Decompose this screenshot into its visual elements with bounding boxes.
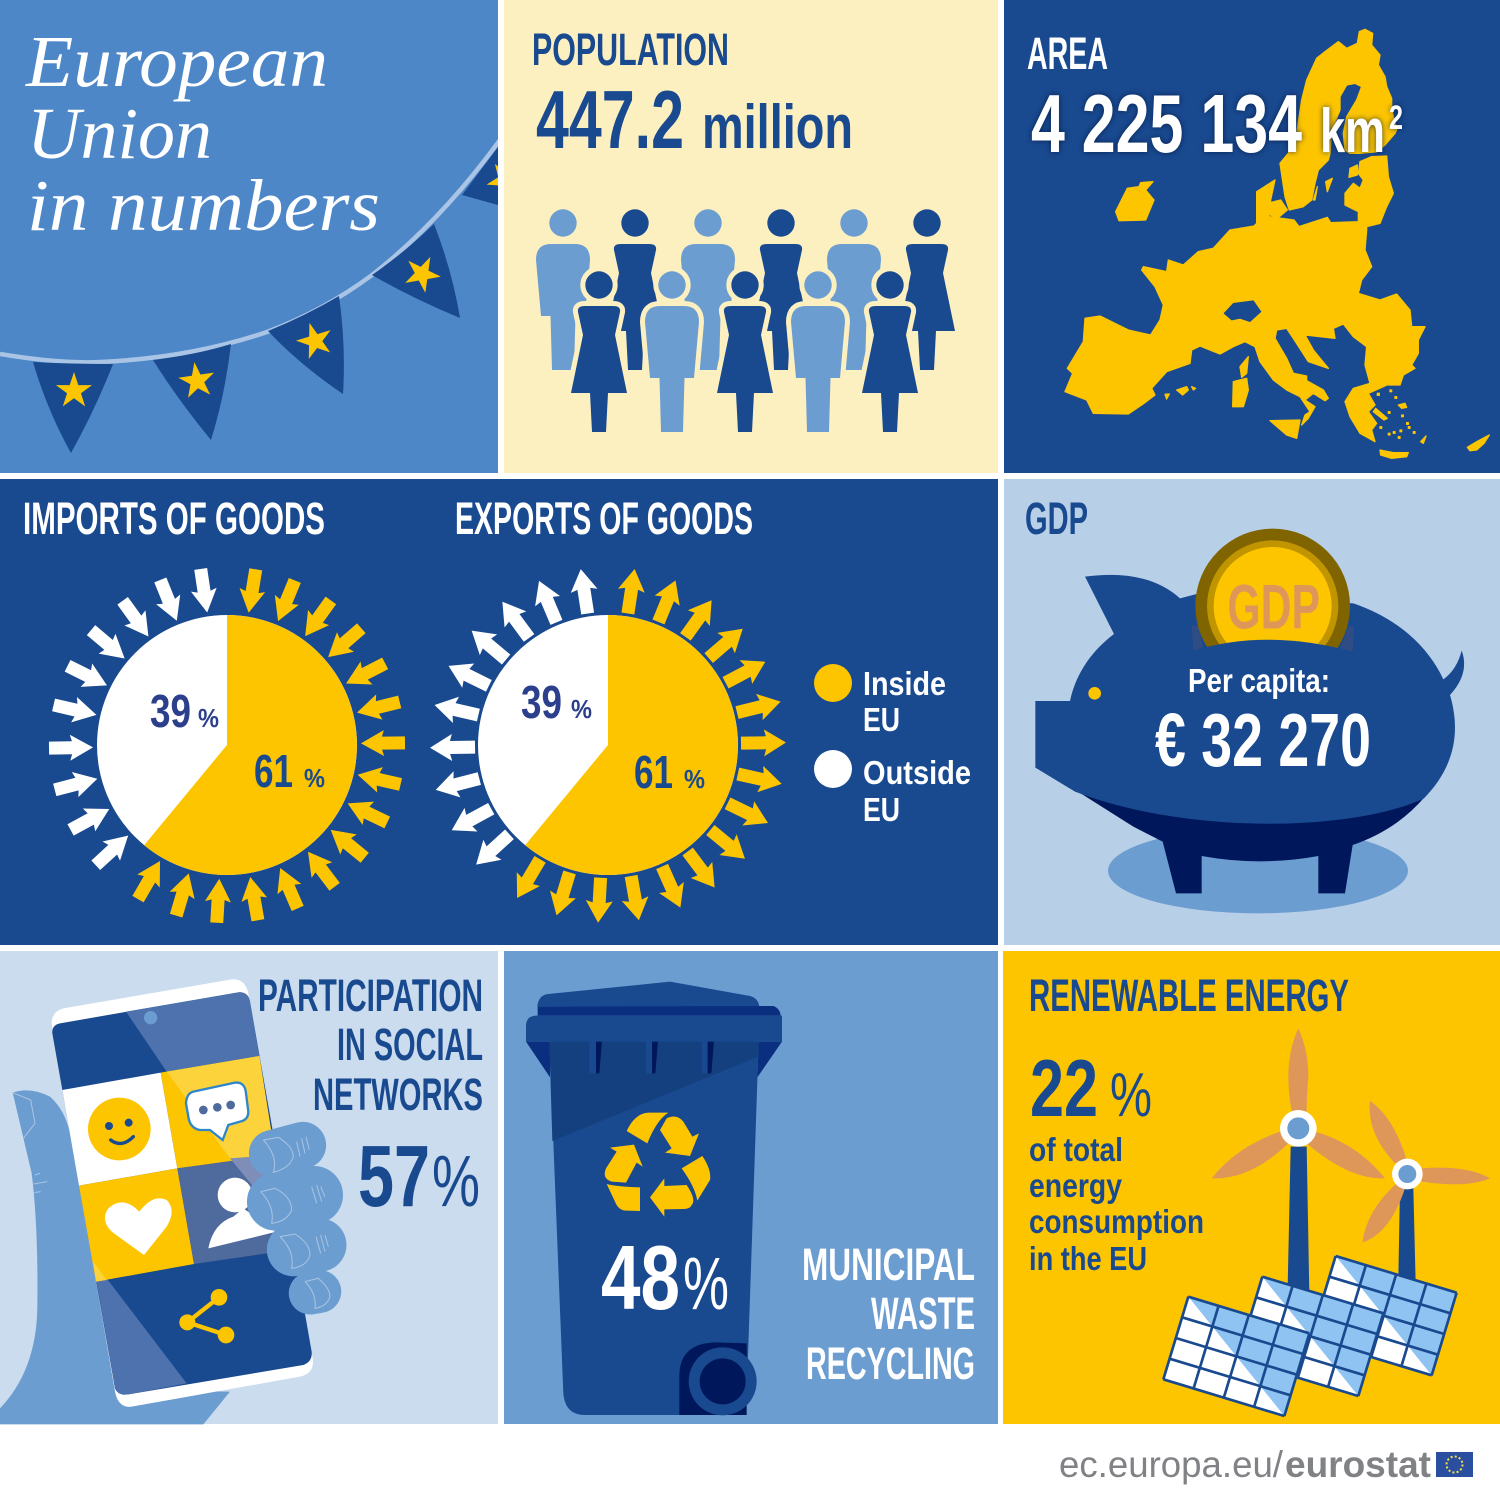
legend: EU (863, 701, 900, 738)
pie chart: exports: % (684, 764, 705, 794)
heading: municipal waste recycling: WASTE (871, 1288, 975, 1339)
bunting garland (0, 140, 531, 453)
pie chart: imports: 39 (150, 685, 191, 737)
icon: piggy bank (1035, 529, 1464, 913)
value: 4 225 134 km2: km (1320, 97, 1385, 166)
icon: group of people (536, 209, 955, 432)
illustration: hand holding phone (0, 979, 351, 1424)
text: of total energy consumption in the EU: energy (1029, 1167, 1123, 1204)
icon: person (208, 1178, 277, 1248)
icon: solar panels (1163, 1256, 1457, 1416)
icon: wheelie bin (526, 982, 782, 1415)
heading: population: POPULATION (532, 24, 729, 75)
panel: municipal waste recycling (504, 951, 998, 1424)
text: of total energy consumption in the EU (1029, 1131, 1204, 1277)
icon: EU flag (1436, 1452, 1473, 1477)
legend: EU (863, 791, 900, 828)
legend: Inside (863, 665, 946, 702)
pie chart: exports: 39 (521, 676, 562, 728)
pie chart: exports: 61 (634, 746, 673, 798)
arrows: exports, outside EU (430, 567, 601, 875)
value: 48 percent: % (683, 1242, 729, 1325)
value: 4 225 134 km2: 4 225 134 (1031, 77, 1302, 170)
heading: participation in social networks: NETWORKS (313, 1069, 483, 1120)
heading: area: AREA (1027, 28, 1108, 79)
panel: renewable energy (1003, 951, 1500, 1424)
value: 57 percent: % (432, 1142, 480, 1222)
panel: title (0, 0, 531, 473)
icon: share (179, 1289, 234, 1343)
heading: participation in social networks: PARTICIPATION (258, 970, 483, 1021)
text: of total energy consumption in the EU: of total (1029, 1131, 1123, 1168)
pie chart: imports: 61 (254, 745, 293, 797)
pie chart: exports: % (571, 694, 592, 724)
footer: eurostat url: ec.europa.eu/ (1059, 1444, 1284, 1485)
arrows: imports, outside EU (49, 567, 220, 875)
footer: eurostat url: eurostat (1285, 1444, 1431, 1485)
pie chart: imports: % (304, 763, 325, 793)
value: 22 percent: % (1110, 1061, 1152, 1130)
icon: recycling symbol (605, 1113, 710, 1217)
label: per capita: Per capita: (1188, 662, 1330, 699)
icon: smiley (88, 1098, 151, 1160)
panel: population (504, 0, 998, 473)
text: of total energy consumption in the EU: consumption (1029, 1203, 1204, 1240)
value: 4 225 134 km2: 2 (1389, 99, 1403, 137)
text: of total energy consumption in the EU: in the EU (1029, 1240, 1147, 1277)
icon: speech bubble (186, 1083, 248, 1140)
heading: European Union in numbers: in numbers (27, 165, 380, 246)
value: 447.2 million: 447.2 (536, 73, 684, 166)
heading: participation in social networks (258, 970, 483, 1120)
map: European Union (1065, 29, 1489, 458)
heading: European Union in numbers: Union (27, 93, 212, 174)
panel: imports and exports of goods (0, 479, 998, 945)
footer: eurostat url (1059, 1444, 1431, 1485)
panel: area (1004, 0, 1500, 473)
value: 48 percent: 48 (601, 1228, 680, 1329)
panel: social networks (0, 951, 498, 1424)
icon: piggy bank: GDP (1227, 572, 1320, 642)
icon: wind turbine small (1362, 1101, 1490, 1283)
value: 32 270 euro: € 32 270 (1155, 698, 1371, 782)
heading: imports of goods: IMPORTS OF GOODS (23, 493, 325, 544)
illustration: wind turbines and solar panels (1163, 1028, 1490, 1416)
panel: GDP (1004, 479, 1500, 945)
heading: European Union in numbers (25, 21, 380, 246)
pie chart: imports: % (198, 703, 219, 733)
value: 57 percent: 57 (358, 1128, 430, 1225)
icon: heart (105, 1198, 172, 1255)
heading: exports of goods: EXPORTS OF GOODS (455, 493, 753, 544)
heading: European Union in numbers: European (25, 21, 328, 102)
value: 22 percent: 22 (1030, 1044, 1098, 1134)
legend (814, 664, 971, 828)
arrows: exports, inside EU (506, 567, 786, 923)
value: 447.2 million: million (702, 93, 853, 162)
pie chart: imports (97, 615, 357, 875)
heading: municipal waste recycling: MUNICIPAL (802, 1239, 975, 1290)
pie chart: exports (478, 615, 738, 875)
heading: municipal waste recycling (802, 1239, 975, 1389)
value: 447.2 million (536, 73, 853, 166)
legend: Outside (863, 754, 971, 791)
heading: GDP: GDP (1025, 493, 1088, 544)
heading: participation in social networks: IN SOCIAL (337, 1019, 483, 1070)
heading: municipal waste recycling: RECYCLING (806, 1338, 975, 1389)
fingers (242, 1117, 351, 1318)
icon: wind turbine large (1212, 1028, 1385, 1293)
arrows: imports, inside EU (127, 567, 405, 923)
